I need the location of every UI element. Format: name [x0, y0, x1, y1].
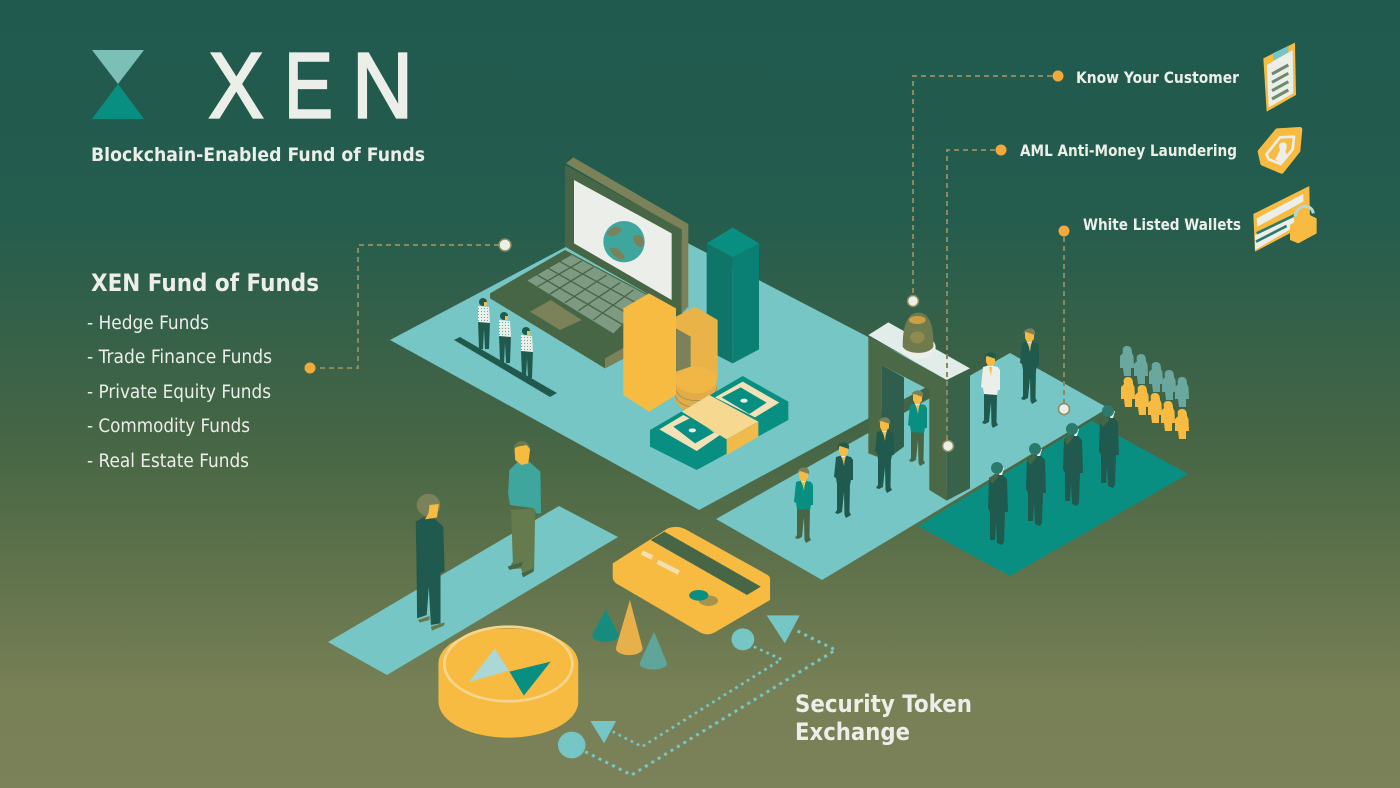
icon: shield: [1260, 129, 1300, 171]
heading: security token exchange: Exchange: [795, 718, 910, 746]
outer loop: [585, 629, 835, 775]
person 3: [521, 327, 533, 378]
callout lines: compliance: [908, 70, 1070, 452]
man in dark sweater: [416, 494, 445, 631]
logo: XEN: [92, 33, 413, 138]
note borders: [659, 382, 779, 451]
person 2: [499, 312, 511, 363]
paper band: [682, 395, 758, 455]
heading: XEN Fund of Funds: XEN Fund of Funds: [91, 269, 319, 297]
customer teal: [794, 467, 813, 543]
logo wordmark: E: [284, 33, 333, 137]
icon: wallet card with padlock: [1253, 186, 1317, 252]
cash stacks: [650, 376, 788, 470]
token coin: [438, 627, 578, 738]
crowd front row: [1121, 377, 1189, 439]
coin column: [675, 307, 718, 412]
queue person 2: [1026, 443, 1046, 526]
queue person 3: [1063, 423, 1083, 506]
trackpad: [530, 300, 582, 330]
person 1: [478, 298, 490, 349]
list item: commodity funds: - Commodity Funds: [87, 416, 250, 437]
platform: main fund floor: [390, 213, 945, 510]
card chip: [699, 595, 718, 606]
queue person 4: [1099, 405, 1119, 488]
people: gate staff and customers: [794, 328, 1119, 545]
icon: globe: [603, 221, 645, 262]
man in teal sweater: [508, 441, 541, 577]
exchange arrows: [558, 615, 835, 775]
customer suit long hair: [875, 417, 894, 493]
laptop screen: [574, 180, 672, 300]
staff suit: [1020, 328, 1039, 404]
card number: [642, 553, 679, 573]
queue person 1: [988, 462, 1008, 545]
cones: [592, 600, 667, 670]
arch top slab: [868, 322, 970, 380]
laptop lid side: [682, 224, 688, 313]
icon: clipboard: [1263, 43, 1296, 112]
laptop screen frame: [565, 165, 682, 313]
arch front: [868, 337, 947, 501]
logo wordmark: X: [208, 34, 264, 138]
customer in arch: [908, 390, 927, 466]
trio stand: [454, 337, 557, 397]
token logo teal: [509, 662, 551, 696]
arch inner wall: [882, 365, 904, 458]
customer suit: [834, 442, 853, 518]
keyboard: [527, 255, 650, 333]
heading: security token exchange: [795, 690, 972, 746]
teal column: [707, 227, 759, 363]
panel: XEN Fund of Funds list: [87, 269, 319, 472]
label: white listed wallets: White Listed Wallets: [1083, 215, 1241, 234]
laptop front edge: [605, 313, 683, 368]
icon: crowd silhouettes: [1120, 346, 1189, 439]
icon: hourglass: [92, 50, 144, 119]
list item: hedge funds: - Hedge Funds: [87, 313, 209, 334]
magnetic stripe: [651, 532, 761, 595]
tagline: Blockchain-Enabled Fund of Funds: [91, 144, 425, 166]
token logo light: [469, 648, 509, 682]
laptop: [490, 157, 688, 368]
logo wordmark: N: [352, 34, 413, 137]
bar chart and money: [623, 227, 759, 412]
platform: walkway: [328, 506, 618, 675]
inner loop: [613, 647, 781, 747]
logo wordmark: [208, 33, 413, 138]
walkway, token and card group: [416, 441, 835, 775]
yellow column: [623, 293, 676, 412]
list item: trade finance funds: - Trade Finance Funds: [87, 347, 272, 368]
platform: dark teal queue floor: [918, 412, 1188, 576]
icons: compliance: [1253, 43, 1317, 252]
label: know your customer: Know Your Customer: [1076, 68, 1239, 87]
platform: gate floor: [716, 353, 1108, 580]
alarm light: [901, 313, 936, 359]
laptop lid top edge: [566, 157, 688, 230]
people on main platform: [454, 298, 557, 397]
callout line: fund of funds: [304, 239, 511, 374]
credit card: [613, 527, 770, 634]
label: AML: AML Anti-Money Laundering: [1020, 141, 1237, 160]
crowd back row: [1120, 346, 1189, 407]
heading: security token exchange: Security Token: [795, 690, 972, 718]
staff white shirt: [981, 352, 1000, 428]
list item: real estate funds: - Real Estate Funds: [87, 451, 249, 472]
gate and queue: [868, 313, 970, 501]
list item: private equity funds: - Private Equity Funds: [87, 382, 271, 403]
arch side: [947, 368, 970, 501]
laptop base: [490, 250, 683, 368]
